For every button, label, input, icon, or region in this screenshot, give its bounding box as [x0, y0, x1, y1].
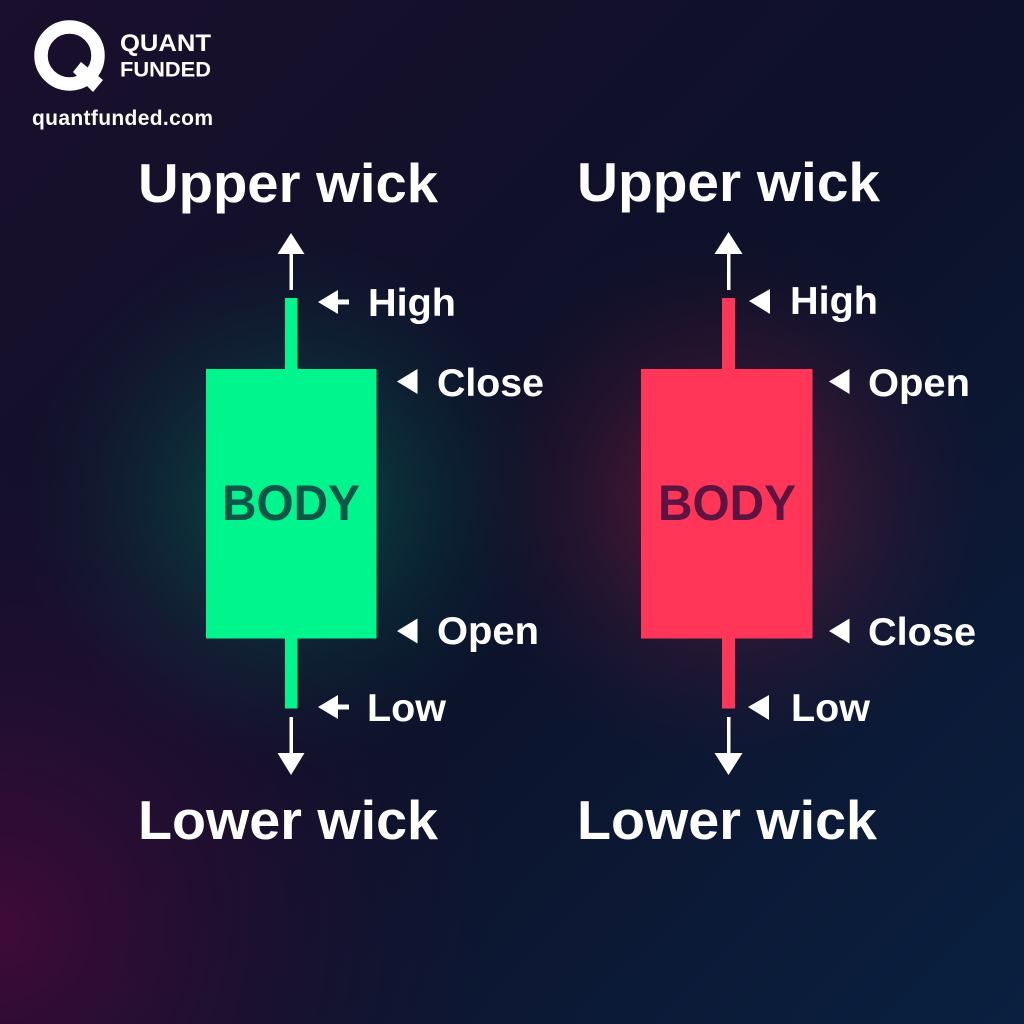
label: high [749, 280, 878, 323]
label: close: Close [437, 362, 544, 405]
arrow: up [278, 233, 304, 290]
label: close: Close [868, 611, 976, 654]
brand name: QUANT [120, 30, 211, 57]
heading: upper wick: Upper wick [577, 151, 880, 213]
candle: green [206, 298, 376, 708]
body label: BODY [658, 475, 796, 531]
brand name [120, 30, 211, 82]
label: high: High [368, 282, 456, 325]
label: low [318, 687, 447, 730]
panel: bullish candle [138, 152, 544, 851]
body label: BODY [222, 475, 360, 531]
label: low: Low [367, 687, 447, 730]
label: low [748, 687, 871, 730]
brand name: FUNDED [120, 58, 211, 82]
icon: Q mark [41, 27, 103, 92]
logo: Quant Funded [32, 27, 213, 130]
label: low: Low [791, 687, 871, 730]
label: open: Open [868, 362, 970, 405]
heading: lower wick: Lower wick [138, 789, 438, 851]
arrow: down [278, 717, 304, 775]
arrow: down [714, 717, 742, 775]
label: open: Open [437, 610, 539, 653]
panel: bearish candle [577, 151, 976, 851]
label: high: High [790, 280, 878, 323]
website: quantfunded.com [32, 107, 213, 130]
arrow: up [714, 232, 742, 290]
heading: upper wick: Upper wick [138, 152, 438, 214]
candle: red [641, 298, 812, 708]
heading: lower wick: Lower wick [577, 789, 877, 851]
label: high [318, 282, 456, 325]
